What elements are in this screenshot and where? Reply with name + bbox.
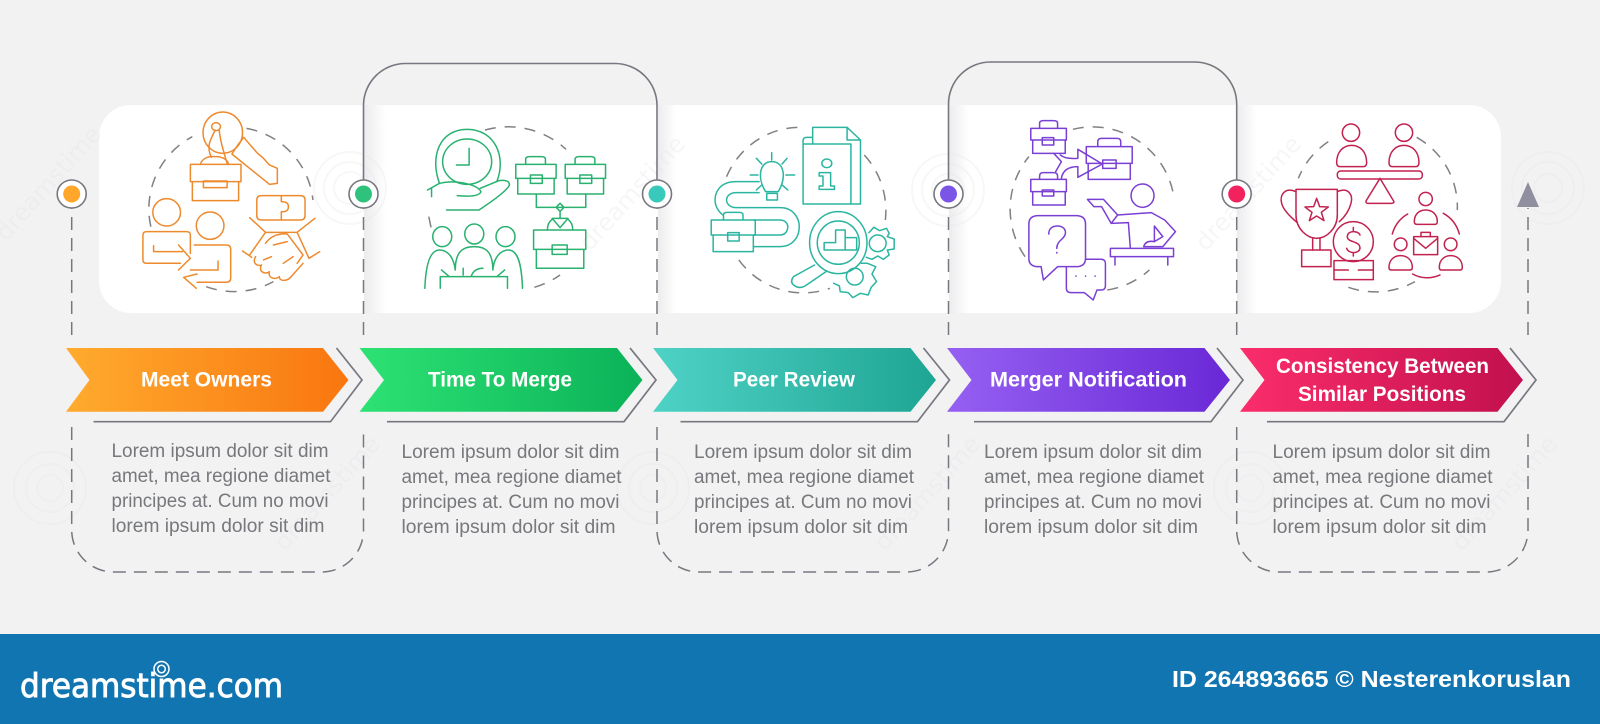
footer credit: ID 264893665 © Nesterenkoruslan — [1172, 666, 1571, 692]
arrow 5 label: Consistency Between — [1276, 355, 1489, 378]
text block 4: Lorem ipsum dolor sit dim — [984, 442, 1202, 463]
text block 3 — [694, 442, 915, 538]
text block 1: amet, mea regione diamet — [112, 466, 331, 487]
icon: consistency between positions — [1281, 124, 1462, 292]
icon: time to merge — [425, 127, 606, 288]
node 2 — [349, 180, 378, 208]
arrow 2 outline — [387, 348, 656, 422]
text block 5: principes at. Cum no movi — [1272, 492, 1490, 513]
end triangle — [1517, 182, 1539, 207]
text block 3: lorem ipsum dolor sit dim — [694, 517, 908, 538]
text block 1 — [112, 441, 331, 537]
footer bar — [0, 634, 1600, 724]
arrow 3 label: Peer Review — [733, 368, 856, 392]
watermarks — [0, 120, 1584, 556]
arrow 4 — [947, 348, 1230, 412]
arrow 1 — [66, 348, 348, 412]
watermarks: dreamstime — [869, 430, 986, 556]
arrow 5 outline — [1267, 348, 1536, 422]
watermarks: dreamstime — [1190, 130, 1307, 256]
text block 2 — [402, 442, 622, 538]
node 1 — [57, 180, 86, 208]
text block 2: lorem ipsum dolor sit dim — [402, 517, 616, 538]
text block 4: amet, mea regione diamet — [984, 467, 1205, 488]
node 3 — [642, 180, 672, 208]
text block 5: amet, mea regione diamet — [1272, 467, 1493, 488]
white icon panel — [99, 105, 1501, 313]
watermarks: dreamstime — [269, 430, 386, 556]
arrow 1 label: Meet Owners — [141, 368, 272, 392]
text block 3: amet, mea regione diamet — [694, 467, 915, 488]
arrow 4 outline — [974, 348, 1243, 422]
text block 3: Lorem ipsum dolor sit dim — [694, 442, 912, 463]
text block 1: lorem ipsum dolor sit dim — [112, 516, 324, 537]
text block 2: principes at. Cum no movi — [402, 492, 620, 513]
text block 5: lorem ipsum dolor sit dim — [1272, 517, 1486, 538]
text block 1: principes at. Cum no movi — [112, 491, 328, 512]
footer logo: dreamstime.com — [20, 666, 283, 705]
icon: meet owners — [143, 112, 320, 292]
arrow 1 outline — [94, 348, 362, 422]
watermarks: dreamstime — [1446, 430, 1563, 556]
icon: peer review — [711, 127, 894, 298]
timeline connector lines — [72, 62, 1528, 572]
arrow 5 label: Similar Positions — [1298, 383, 1466, 406]
arrow 5 — [1240, 348, 1523, 412]
text block 1: Lorem ipsum dolor sit dim — [112, 441, 328, 462]
arrow 3 — [653, 348, 936, 412]
arrow 2 — [360, 348, 642, 412]
arrow 3 outline — [680, 348, 950, 422]
watermarks: dreamstime — [574, 130, 691, 256]
text block 4: principes at. Cum no movi — [984, 492, 1202, 513]
text block 5 — [1272, 442, 1493, 538]
text block 4 — [984, 442, 1205, 538]
node 5 — [1222, 180, 1251, 208]
arrow 2 label: Time To Merge — [428, 368, 572, 392]
text block 2: Lorem ipsum dolor sit dim — [402, 442, 620, 463]
arrow 5 label — [1276, 355, 1489, 406]
node 4 — [934, 180, 963, 208]
text block 3: principes at. Cum no movi — [694, 492, 912, 513]
text block 2: amet, mea regione diamet — [402, 467, 622, 488]
arrow 4 label: Merger Notification — [990, 368, 1187, 392]
text block 4: lorem ipsum dolor sit dim — [984, 517, 1198, 538]
icon: merger notification — [1010, 121, 1175, 300]
text block 5: Lorem ipsum dolor sit dim — [1272, 442, 1490, 463]
